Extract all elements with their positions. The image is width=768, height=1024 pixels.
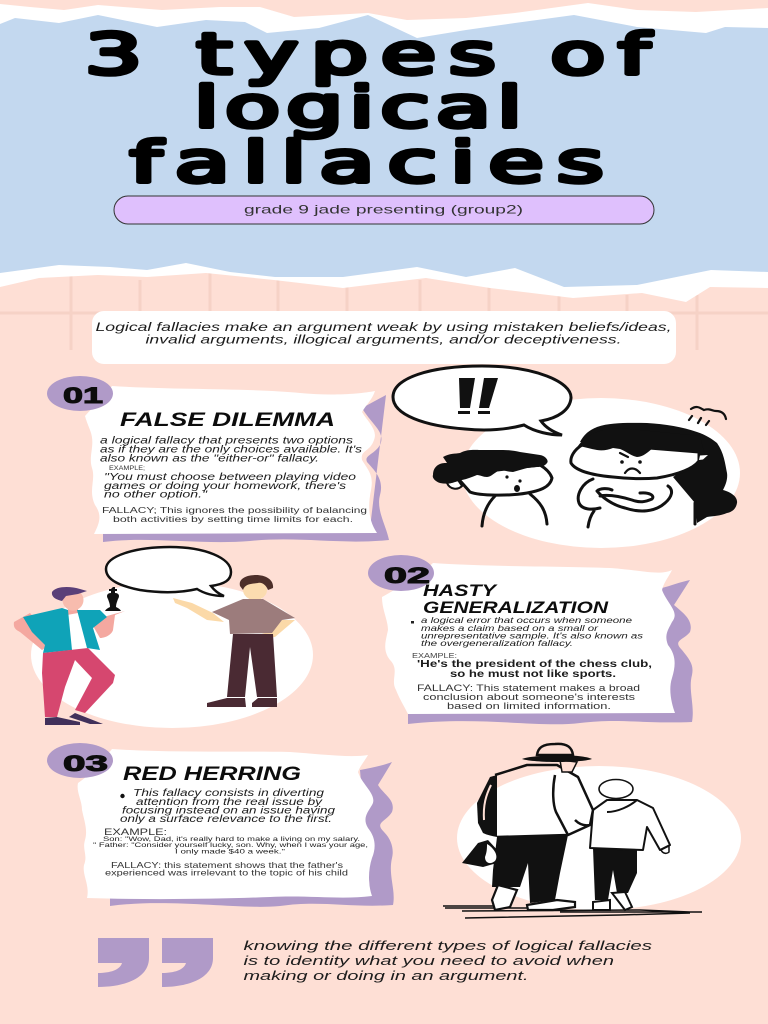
header: torn paper banner [0,3,768,302]
closing statement: knowing the different types of logical fallacies [244,938,653,953]
child [590,780,670,910]
fallacy explanation: FALLACY: This statement makes a broad [417,683,640,693]
heading: GENERALIZATION [423,599,609,617]
example: 'He's the president of the chess club, [417,659,652,670]
number badge 01 [47,376,113,411]
intro text box: Logical fallacies make an argument weak by using mistaken beliefs/ideas, [96,320,672,334]
example: I only made $40 a week." [175,848,286,856]
definition text: makes a claim based on a small or [421,623,600,633]
definition text: focusing instead on an issue having [122,806,336,816]
definition text: unrepresentative sample. It's also known as [421,630,644,640]
definition text: a logical error that occurs when someone [421,615,632,625]
number badge 01: 01 [63,383,103,408]
fallacy explanation: both activities by setting time limits for each. [113,515,353,524]
example: " Father: "Consider yourself lucky, son. Why, when I was your age, [93,842,368,849]
definition text [120,788,336,825]
torn white paper edge [0,3,768,302]
child [433,450,552,526]
title: 3 types of [85,22,652,87]
example: EXAMPLE: [104,827,167,838]
title: logical [194,75,522,140]
blue paper [0,15,768,287]
fallacy explanation [417,683,640,711]
intro text box [92,311,676,364]
example: so he must not like sports. [450,669,616,680]
heading: FALSE DILEMMA [120,410,335,431]
illustration: two men and chess piece [14,547,313,728]
number badge 02: 02 [384,563,430,588]
definition text: a logical fallacy that presents two options [100,436,353,446]
speech bubble with exclamation marks [393,366,571,435]
example: EXAMPLE: [412,653,457,660]
closing statement: is to identity what you need to avoid when [244,953,614,968]
heading: HASTY [423,582,499,600]
example [412,653,652,680]
subtitle pill [114,196,654,224]
example [93,827,368,856]
example [104,465,357,500]
definition text: the overgeneralization fallacy. [421,638,573,648]
title: fallacies [130,130,604,195]
fallacy explanation [105,860,348,878]
heading: RED HERRING [123,764,301,785]
example: Son: "Wow, Dad, it's really hard to make a living on my salary. [103,836,360,843]
fallacy explanation: based on limited information. [447,701,611,711]
definition text: attention from the real issue by [136,797,323,808]
example: "You must choose between playing video [104,472,357,483]
fallacy explanation: conclusion about someone's interests [423,692,636,702]
closing statement [244,938,653,983]
definition text [100,436,362,464]
number badge 03 [47,743,113,778]
number badge 03: 03 [63,751,108,776]
old man [462,744,593,910]
woman [571,407,737,527]
definition text: only a surface relevance to the first. [120,814,332,825]
panel: 03 red herring [47,743,394,907]
definition text: also known as the "either-or" fallacy. [100,454,319,464]
panel: 02 hasty generalization [368,555,693,724]
closing statement: making or doing in an argument. [244,968,528,983]
example: EXAMPLE; [109,465,145,472]
illustration: old man and child walking [443,744,741,918]
fallacy explanation: FALLACY; This ignores the possibility of balancing [102,506,367,515]
fallacy explanation: experienced was irrelevant to the topic of his child [105,868,348,878]
example: games or doing your homework, there's [104,481,346,492]
definition text: as if they are the only choices available. It's [100,444,362,456]
man in mauve shirt [173,575,295,707]
heading [423,582,609,617]
intro text box: invalid arguments, illogical arguments, and/or deceptiveness. [146,332,622,346]
definition text [411,615,644,648]
closing quote marks [98,938,213,987]
handbag [462,840,500,867]
illustration: arguing woman and child [393,366,740,548]
panel: 01 false dilemma [47,376,389,542]
example: no other option." [104,490,208,500]
fallacy explanation: FALLACY: this statement shows that the father's [111,860,343,870]
title [85,22,652,195]
hat and face [560,760,577,772]
number badge 02 [368,555,434,591]
man in teal shirt [14,587,125,725]
empty speech bubble [106,547,231,596]
subtitle pill: grade 9 jade presenting (group2) [244,202,523,216]
chess king [105,587,121,611]
fallacy explanation [102,506,367,524]
definition text: This fallacy consists in diverting [133,788,325,799]
ground lines [443,906,702,918]
